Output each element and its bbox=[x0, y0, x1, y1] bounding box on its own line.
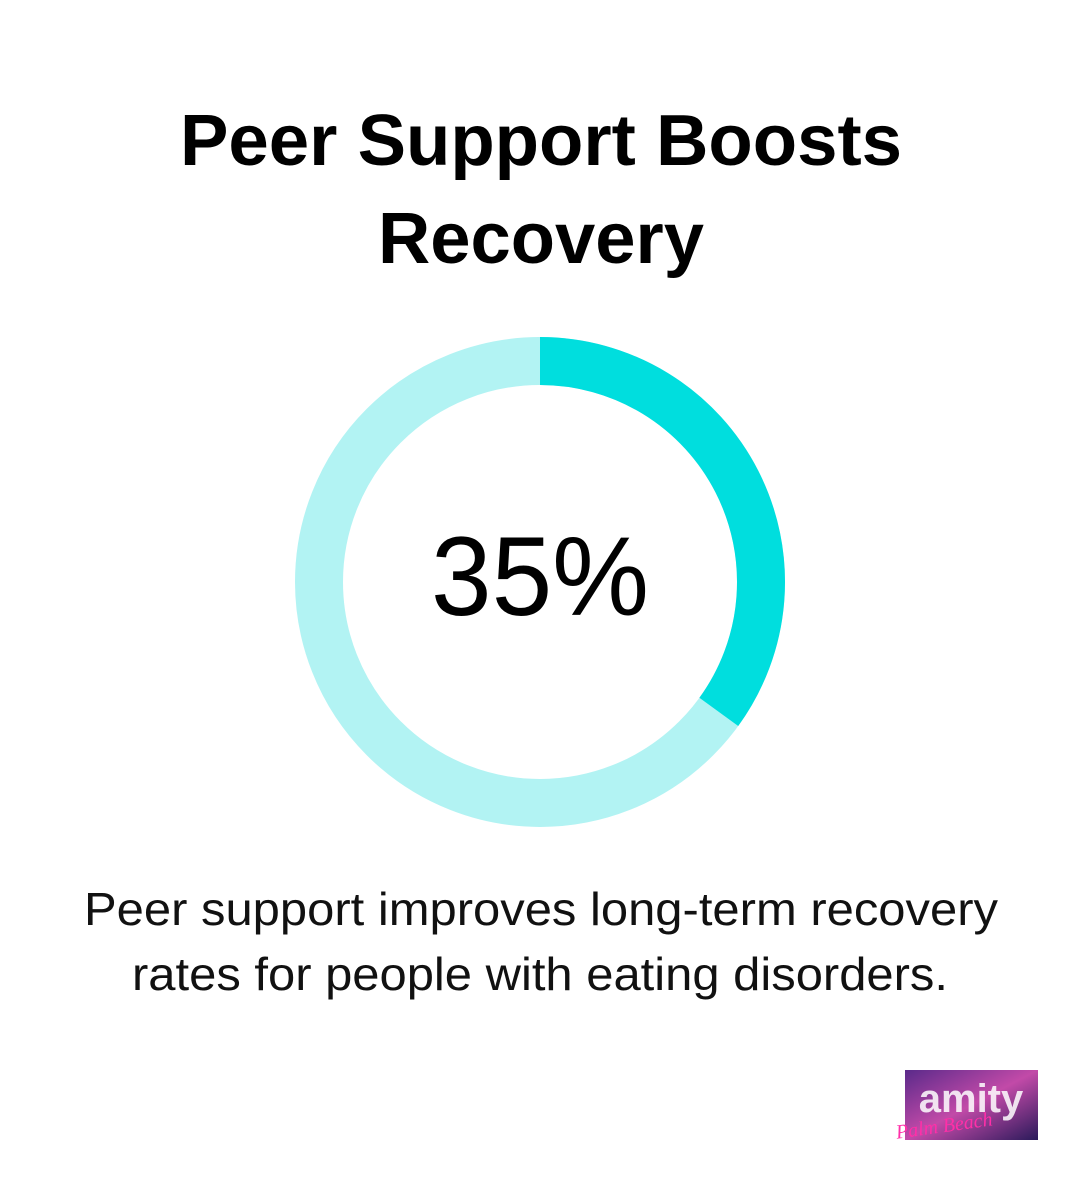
title: Peer Support Boosts bbox=[180, 101, 902, 181]
percentage value: 35% bbox=[431, 514, 649, 639]
caption: rates for people with eating disorders. bbox=[132, 948, 948, 1000]
title bbox=[180, 101, 902, 279]
caption bbox=[84, 883, 998, 1000]
logo: amity Palm Beach: amity bbox=[919, 1077, 1024, 1121]
title: Recovery bbox=[378, 199, 704, 279]
donut chart bbox=[319, 361, 761, 803]
caption: Peer support improves long-term recovery bbox=[84, 883, 998, 935]
logo: amity Palm Beach: Palm Beach bbox=[894, 1108, 994, 1144]
logo: amity Palm Beach bbox=[894, 1070, 1038, 1144]
